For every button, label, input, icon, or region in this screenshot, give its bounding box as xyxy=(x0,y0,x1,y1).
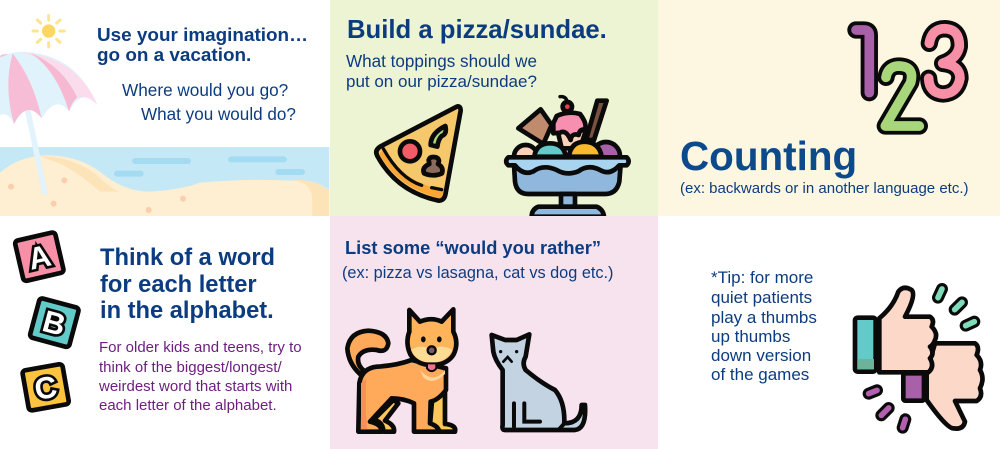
description line three: weirdest word that starts with xyxy=(98,378,292,395)
icon: pizza slice xyxy=(376,106,461,201)
tip line four: up thumbs xyxy=(711,327,790,346)
examples: (ex: pizza vs lasagna, cat vs dog etc.) xyxy=(342,264,613,282)
icon: ice cream sundae xyxy=(506,97,629,217)
icon: cat xyxy=(492,334,585,430)
tip line three: play a thumbs xyxy=(711,308,817,327)
question line two: put on our pizza/sundae? xyxy=(346,72,537,91)
counting examples: (ex: backwards or in another language etc.) xyxy=(680,180,968,197)
panel: alphabet xyxy=(0,216,330,449)
illustration: beach scene xyxy=(0,16,329,216)
icon: thumbs up and down xyxy=(855,288,982,429)
tip line five: down version xyxy=(711,346,811,365)
panel: pizza and sundae xyxy=(330,0,658,217)
heading: vacation: Use your imagination… xyxy=(97,25,308,46)
heading line three: in the alphabet. xyxy=(100,298,274,324)
panel: would you rather xyxy=(330,216,658,449)
question line one: What toppings should we xyxy=(346,52,537,71)
description line four: each letter of the alphabet. xyxy=(99,397,277,414)
question two: What you would do? xyxy=(141,105,296,124)
icon: letter blocks: B xyxy=(39,304,69,343)
panel: vacation xyxy=(0,0,330,216)
icon: letter blocks: C xyxy=(32,370,60,407)
question one: Where would you go? xyxy=(122,80,288,100)
tip line two: quiet patients xyxy=(711,288,812,307)
panel: tip xyxy=(658,216,1000,449)
heading: think of a word: Think of a word xyxy=(100,245,275,271)
icon: letter blocks xyxy=(15,232,79,411)
description line one: For older kids and teens, try to xyxy=(99,339,302,356)
description line two: think of the biggest/longest/ xyxy=(99,359,282,376)
heading: counting: Counting xyxy=(680,133,857,179)
tip line six: of the games xyxy=(711,365,809,384)
heading: build a pizza: Build a pizza/sundae. xyxy=(347,16,607,44)
icon: numbers 1 2 3 xyxy=(856,29,960,126)
panel: counting xyxy=(658,0,1000,216)
icon: letter blocks: A xyxy=(25,239,54,277)
heading: would you rather: List some “would you rather” xyxy=(345,237,601,258)
tip line one: *Tip: for more xyxy=(711,268,813,287)
heading line two: for each letter xyxy=(100,272,257,298)
icon: dog xyxy=(347,309,456,432)
heading line two: go on a vacation. xyxy=(97,45,251,66)
